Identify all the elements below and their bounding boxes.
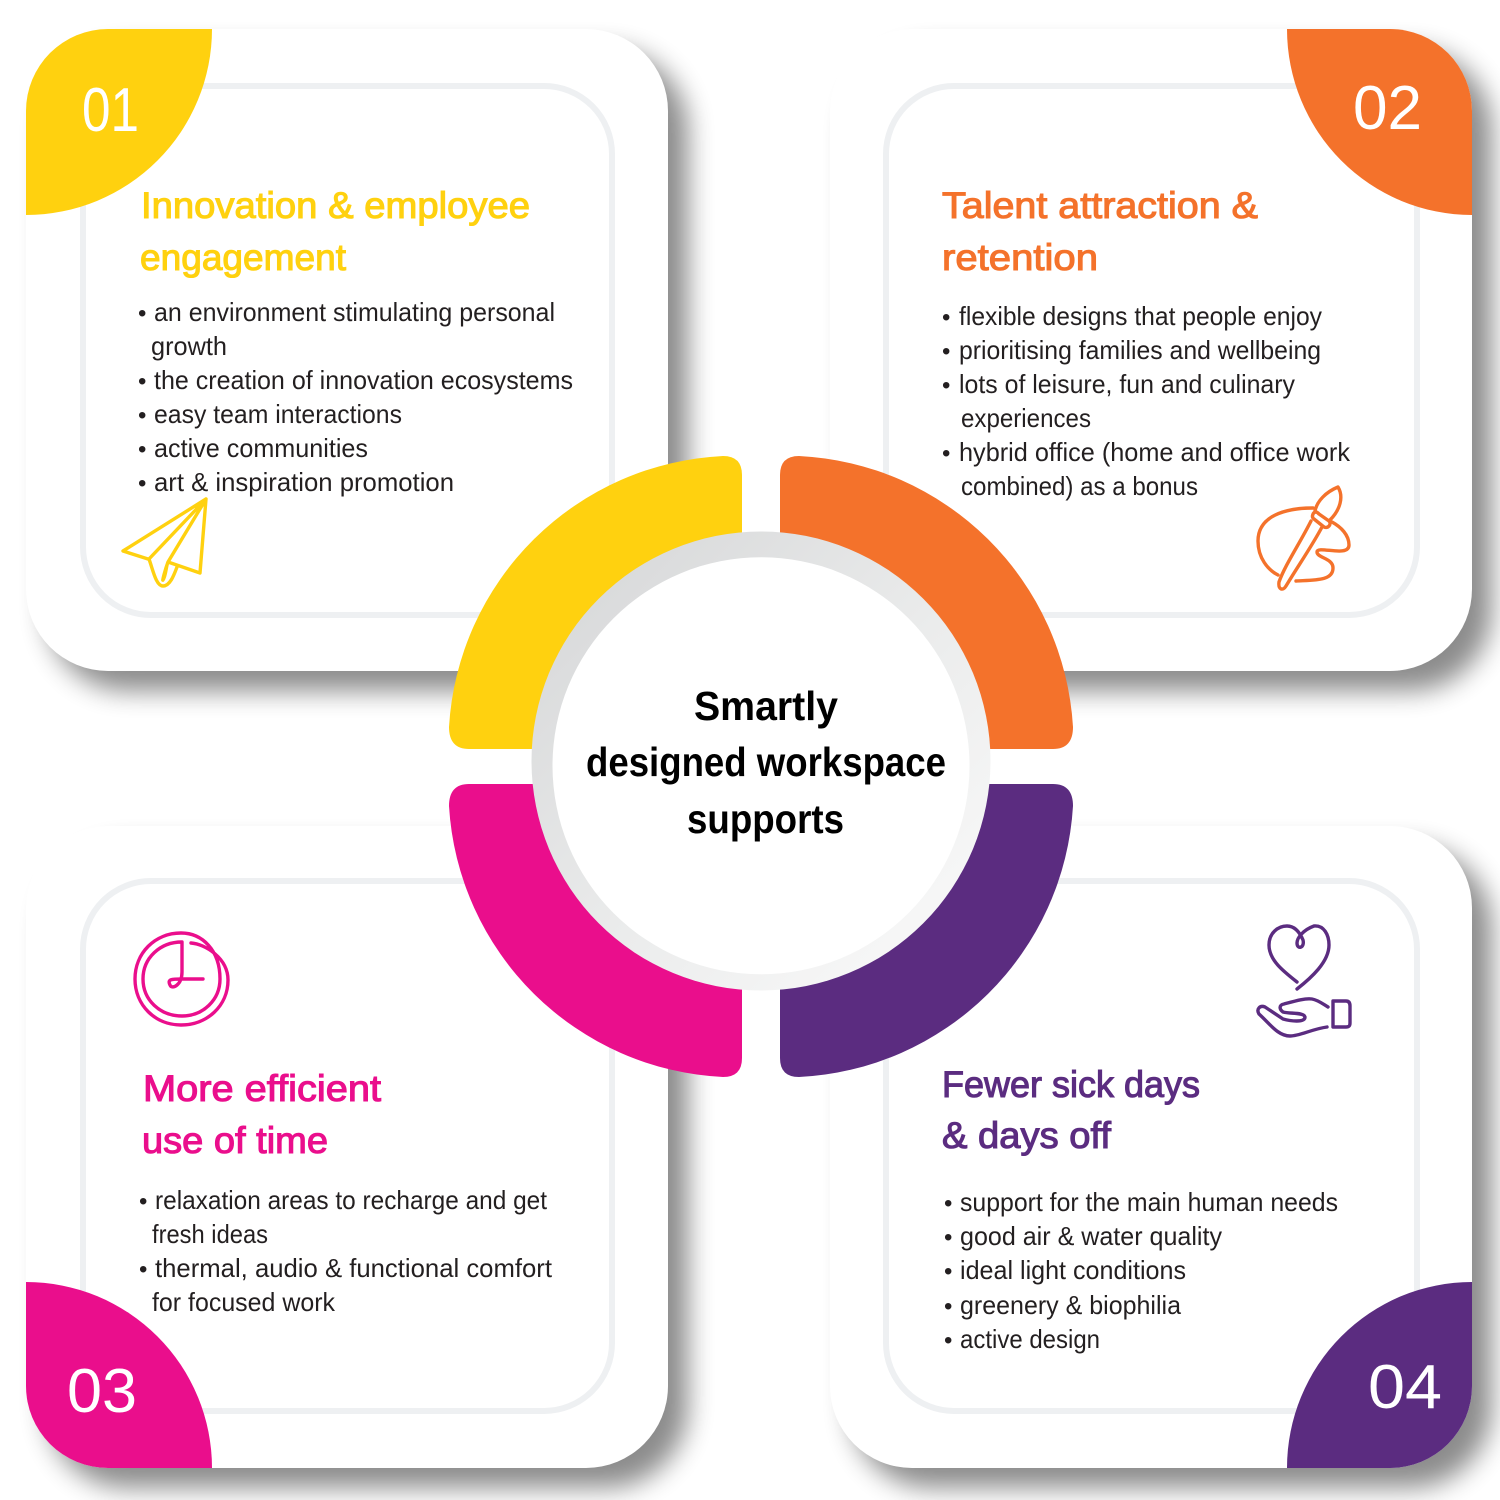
- bullet list: experiences: [961, 403, 1091, 433]
- white centre circle: [552, 557, 970, 974]
- icon: paint palette and brush: [1258, 487, 1349, 589]
- quadrant: yellow: [449, 456, 742, 749]
- bullet list: [139, 1185, 553, 1317]
- bullet list: combined) as a bonus: [961, 471, 1198, 501]
- centre title: designed workspace: [586, 739, 946, 785]
- heading: [140, 185, 530, 278]
- panel: more efficient use of time: [26, 826, 688, 1488]
- bullet list: •: [942, 440, 950, 467]
- bullet list: •: [944, 1190, 952, 1217]
- bullet list: •: [138, 300, 146, 327]
- bullet list: active design: [960, 1324, 1100, 1354]
- bullet list: ideal light conditions: [960, 1255, 1186, 1285]
- bullet list: •: [139, 1188, 147, 1215]
- bullet list: prioritising families and wellbeing: [959, 335, 1321, 365]
- panel: talent attraction and retention: [830, 29, 1492, 691]
- bullet list: fresh ideas: [152, 1219, 268, 1249]
- centre title: [586, 683, 946, 842]
- number badge 03: 03: [67, 1357, 137, 1426]
- bullet list: thermal, audio & functional comfort: [155, 1253, 553, 1283]
- bullet list: active communities: [154, 433, 368, 463]
- number badge 01: [26, 29, 212, 215]
- heading: use of time: [142, 1120, 328, 1161]
- number badge 01: 01: [82, 76, 139, 145]
- bullet list: •: [942, 372, 950, 399]
- heading: Innovation & employee: [141, 185, 530, 226]
- bullet list: •: [138, 402, 146, 429]
- bullet list: •: [138, 368, 146, 395]
- heading: [942, 185, 1258, 278]
- bullet list: •: [942, 304, 950, 331]
- number badge 04: 04: [1368, 1353, 1442, 1422]
- heading: Fewer sick days: [942, 1064, 1200, 1105]
- heading: More efficient: [143, 1068, 382, 1109]
- bullet list: •: [139, 1256, 147, 1283]
- bullet list: •: [138, 470, 146, 497]
- bullet list: •: [944, 1258, 952, 1285]
- quadrant: purple: [780, 784, 1073, 1077]
- hub: coloured quadrants and central circle: [449, 456, 1073, 1077]
- number badge 02: 02: [1353, 74, 1422, 143]
- bullet list: growth: [151, 331, 227, 361]
- bullet list: good air & water quality: [960, 1221, 1222, 1251]
- bullet list: easy team interactions: [154, 399, 402, 429]
- icon: paper airplane: [123, 499, 206, 586]
- bullet list: •: [942, 338, 950, 365]
- heading: & days off: [942, 1115, 1112, 1156]
- panel: innovation and employee engagement: [26, 29, 688, 691]
- bullet list: •: [944, 1327, 952, 1354]
- bullet list: •: [138, 436, 146, 463]
- bullet list: relaxation areas to recharge and get: [155, 1185, 548, 1215]
- bullet list: •: [944, 1293, 952, 1320]
- quadrant: magenta: [449, 784, 742, 1077]
- bullet list: greenery & biophilia: [960, 1290, 1182, 1320]
- heading: engagement: [140, 237, 347, 278]
- bullet list: [944, 1187, 1338, 1354]
- grey ring: [532, 532, 990, 990]
- bullet list: [138, 297, 573, 497]
- number badge 02: [1287, 29, 1472, 215]
- heading: [142, 1068, 382, 1161]
- icon: clock: [135, 933, 228, 1025]
- quadrant: orange: [780, 456, 1073, 749]
- bullet list: an environment stimulating personal: [154, 297, 555, 327]
- bullet list: hybrid office (home and office work: [959, 437, 1351, 467]
- bullet list: [942, 301, 1351, 501]
- icon: heart over open hand: [1258, 926, 1350, 1036]
- heading: [942, 1064, 1200, 1156]
- bullet list: the creation of innovation ecosystems: [154, 365, 573, 395]
- heading: retention: [942, 237, 1098, 278]
- bullet list: for focused work: [152, 1287, 336, 1317]
- centre title: Smartly: [694, 683, 838, 729]
- centre title: supports: [687, 796, 844, 842]
- bullet list: art & inspiration promotion: [154, 467, 454, 497]
- heading: Talent attraction &: [942, 185, 1258, 226]
- bullet list: •: [944, 1224, 952, 1251]
- number badge 04: [1287, 1282, 1472, 1468]
- bullet list: support for the main human needs: [960, 1187, 1338, 1217]
- number badge 03: [26, 1282, 212, 1468]
- bullet list: flexible designs that people enjoy: [959, 301, 1322, 331]
- bullet list: lots of leisure, fun and culinary: [959, 369, 1295, 399]
- panel: fewer sick days and days off: [830, 826, 1492, 1488]
